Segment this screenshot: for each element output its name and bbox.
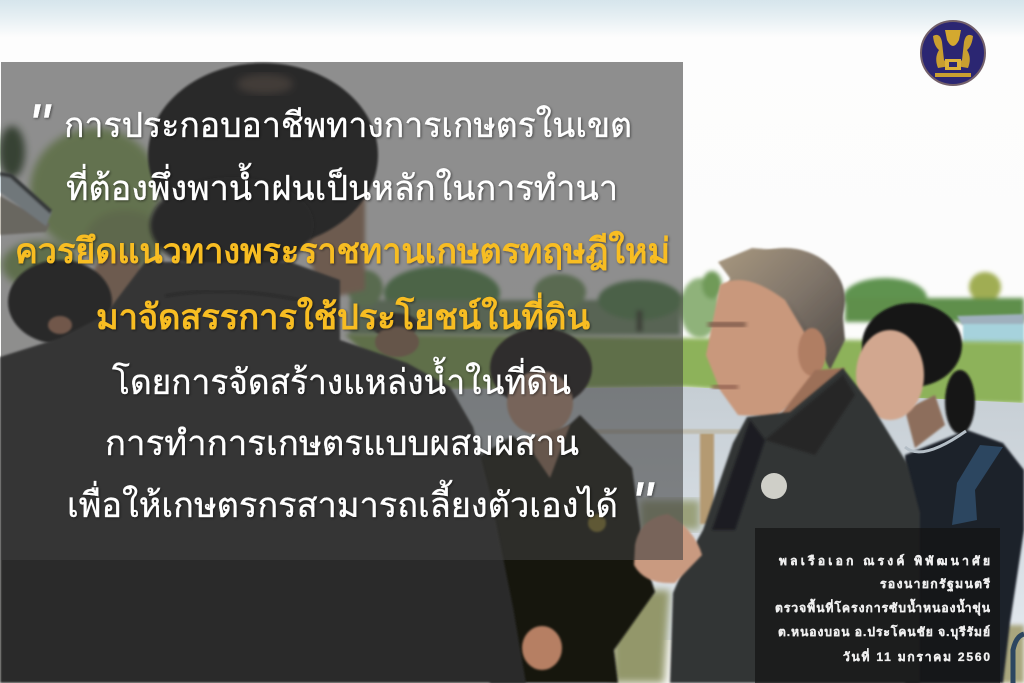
closing quote mark: " bbox=[631, 470, 655, 537]
ground bbox=[612, 590, 670, 683]
woman with backpack bbox=[856, 303, 1024, 683]
house bbox=[0, 172, 52, 235]
building far right bbox=[957, 314, 1024, 344]
quote line 1: การประกอบอาชีพทางการเกษตรในเขต bbox=[64, 105, 632, 145]
water bbox=[400, 387, 1024, 640]
caption text: พลเรือเอก ณรงค์ พิพัฒนาศัย bbox=[779, 554, 990, 568]
foreground man bbox=[0, 63, 526, 683]
caption text bbox=[775, 554, 991, 664]
caption text: วันที่ 11 มกราคม 2560 bbox=[843, 648, 990, 664]
woman in black jacket bbox=[470, 328, 655, 683]
quote line 6: การทำการเกษตรแบบผสมผสาน bbox=[105, 424, 579, 463]
distant tree line bbox=[347, 266, 1024, 338]
fence post bbox=[700, 432, 714, 524]
green field bbox=[345, 334, 1024, 404]
left trees bbox=[0, 126, 165, 289]
quote line 7: เพื่อให้เกษตรกรสามารถเลี้ยงตัวเองได้ bbox=[67, 479, 618, 525]
caption text: ตรวจพื้นที่โครงการซับน้ำหนองน้ำขุ่น bbox=[775, 598, 991, 616]
highlighted quote line 3: ควรยึดแนวทางพระราชทานเกษตรทฤษฎีใหม่ bbox=[15, 230, 670, 271]
caption text: รองนายกรัฐมนตรี bbox=[880, 577, 991, 592]
translucent quote panel bbox=[1, 62, 683, 560]
left man: head and face bbox=[8, 252, 146, 344]
opening quote mark: " bbox=[28, 92, 52, 159]
quote line 5: โดยการจัดสร้างแหล่งน้ำในที่ดิน bbox=[112, 356, 571, 402]
main man: hair, face, black jacket bbox=[634, 248, 920, 683]
quote text block bbox=[15, 92, 670, 537]
highlighted quote line 4: มาจัดสรรการใช้ประโยชน์ในที่ดิน bbox=[96, 292, 590, 337]
background person bbox=[371, 313, 419, 357]
caption panel bbox=[755, 528, 1000, 683]
icon: government seal logo bbox=[921, 21, 985, 85]
quote line 2: ที่ต้องพึ่งพาน้ำฝนเป็นหลักในการทำนา bbox=[66, 162, 618, 208]
caption text: ต.หนองบอน อ.ประโคนชัย จ.บุรีรัมย์ bbox=[778, 624, 990, 640]
